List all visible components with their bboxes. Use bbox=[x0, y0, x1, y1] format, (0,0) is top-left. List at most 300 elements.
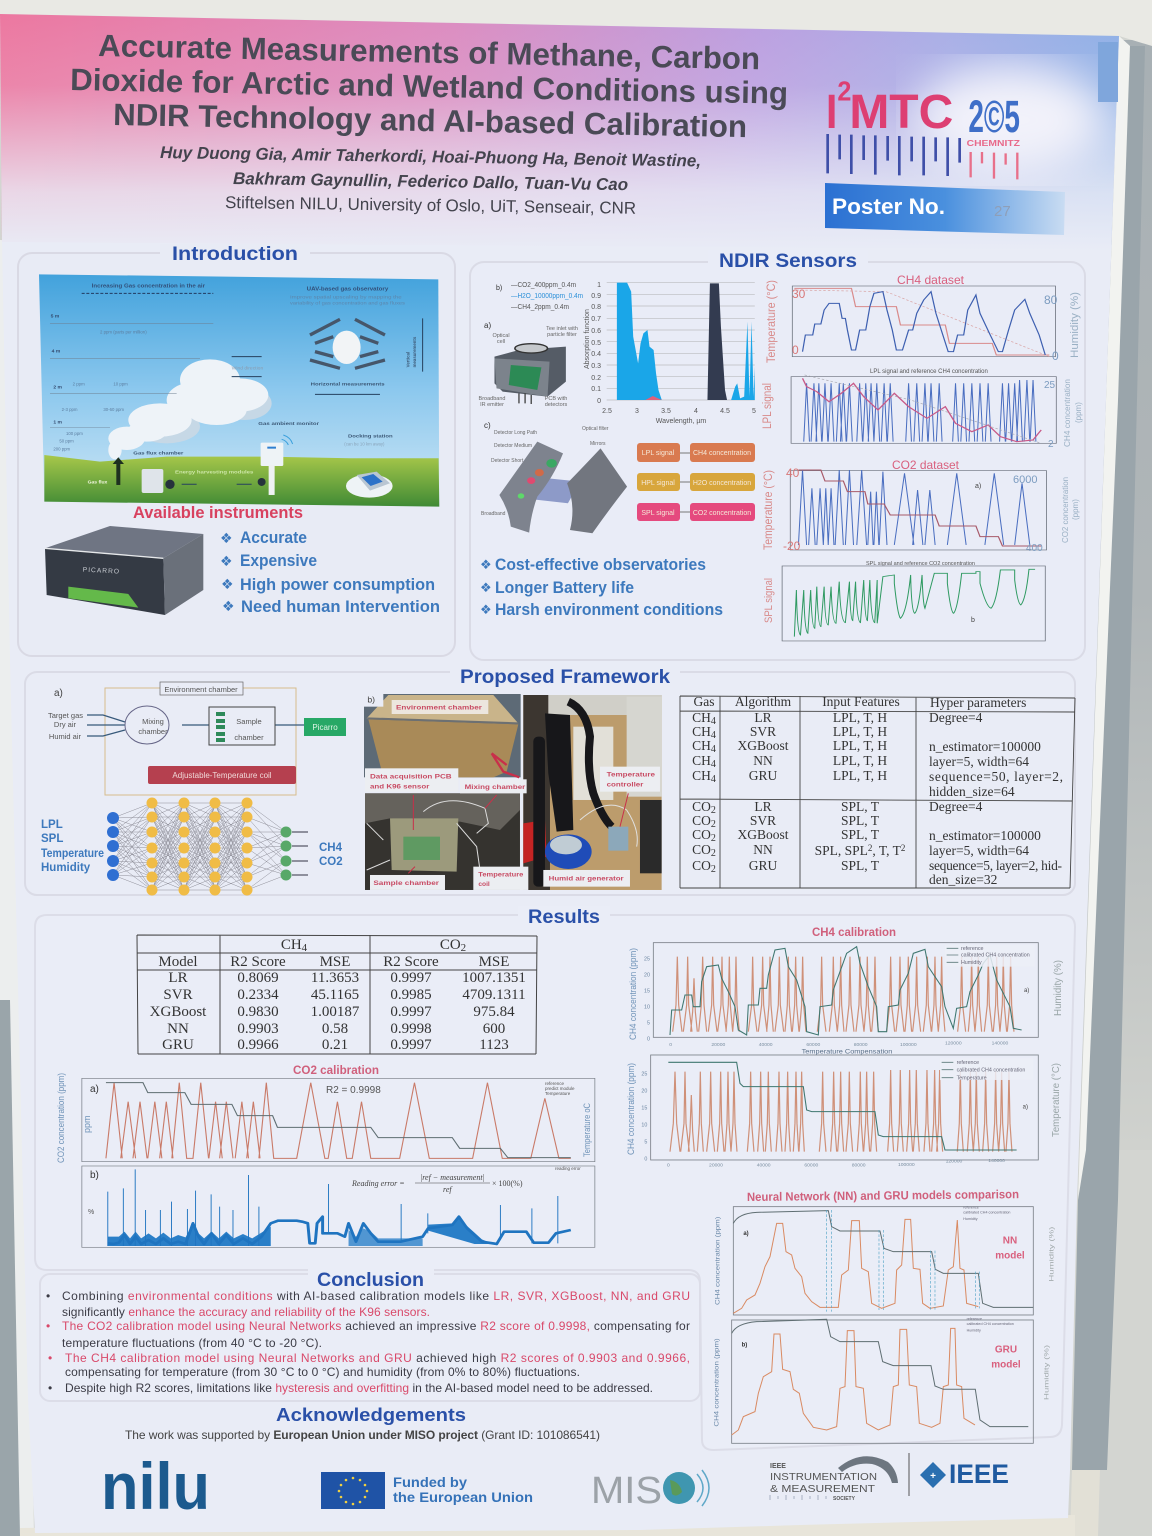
chart: LPL signal: (ppm) bbox=[1074, 402, 1083, 423]
chart: NN and GRU comparison: GRU bbox=[995, 1345, 1017, 1356]
legends: 0 bbox=[669, 1042, 672, 1048]
table: algorithms and hyper parameters: SVR bbox=[750, 724, 776, 739]
text: conclusion bullets: Combining environmental conditions with AI-based calibration models like LR, SVR, XGBoost, NN, and GRU bbox=[62, 1289, 690, 1303]
illustration: optical cavity: Detector Medium bbox=[494, 443, 532, 449]
table: model scores: 0.9830 bbox=[237, 1004, 279, 1020]
logo: IEEE Instrumentation and Measurement Society: INSTRUMENTATION bbox=[770, 1471, 877, 1483]
photo labels: Humid air generator bbox=[549, 876, 624, 883]
chart: LPL signal: 25 bbox=[1044, 380, 1056, 391]
diagram: signal to concentration: CO2 concentration bbox=[693, 510, 751, 517]
chart: NN and GRU comparison: b) bbox=[742, 1343, 747, 1349]
chart: CO2 dataset: 400 bbox=[1026, 543, 1043, 554]
list: instrument drawbacks: Accurate bbox=[240, 528, 307, 547]
table: model scores bbox=[137, 935, 537, 1054]
photo labels bbox=[364, 694, 660, 890]
illustration: K96 sensor: particle filter bbox=[547, 332, 577, 338]
legends: 25 bbox=[641, 1071, 647, 1077]
table: model scores: 0.21 bbox=[322, 1037, 348, 1053]
diagram: neural network bbox=[41, 798, 343, 896]
diagram: neural network: LPL bbox=[41, 819, 63, 831]
logo: IEEE Instrumentation and Measurement Society: & MEASUREMENT bbox=[770, 1483, 876, 1495]
table: algorithms and hyper parameters: LPL, T, H bbox=[833, 738, 887, 753]
chart: SPL signal: b bbox=[971, 617, 975, 624]
logo: IEEE Instrumentation and Measurement Society: IEEE bbox=[770, 1463, 786, 1470]
table: algorithms and hyper parameters: n_estimator=100000 bbox=[929, 739, 1041, 754]
authors bbox=[160, 143, 701, 218]
logo: IEEE Instrumentation and Measurement Society: IEEE bbox=[949, 1459, 1009, 1489]
chart: absorption spectrum: 4.5 bbox=[720, 408, 730, 415]
photo: humid air generator bbox=[523, 695, 662, 890]
chart: NN and GRU comparison: calibrated CH4 concentration bbox=[967, 1322, 1014, 1326]
chart: NN and GRU comparison: Neural Network (NN) and GRU models comparison bbox=[747, 1187, 1019, 1204]
text: acknowledgement: The work was supported by European Union under MISO project (Grant ID: 101086541) bbox=[125, 1428, 600, 1442]
legends: calibrated CH4 concentration bbox=[957, 1067, 1025, 1073]
subheading: available instruments: Available instruments bbox=[133, 503, 303, 522]
illustration: optical cavity: Optical filter bbox=[582, 426, 609, 432]
chart: SPL signal: SPL signal and reference CO2 concentration bbox=[866, 561, 975, 567]
text: conclusion bullets: • bbox=[46, 1319, 50, 1333]
table: algorithms and hyper parameters: CO bbox=[692, 799, 711, 814]
legends: 120000 bbox=[945, 1041, 962, 1047]
table: model scores: 0.9998 bbox=[390, 1021, 432, 1037]
table: model scores: 4709.1311 bbox=[462, 987, 526, 1003]
list: NDIR advantages: Cost-effective observatories bbox=[495, 555, 706, 574]
text: conclusion bullets: significantly enhance the accuracy and reliability of the K96 sensors. bbox=[62, 1305, 430, 1319]
text: conclusion bullets: • bbox=[48, 1381, 52, 1395]
table: model scores: 975.84 bbox=[473, 1004, 515, 1020]
table: model scores: 0.9997 bbox=[390, 970, 432, 986]
table: algorithms and hyper parameters: sequence=50, layer=2, bbox=[929, 769, 1063, 784]
table: model scores: R2 Score bbox=[383, 954, 439, 970]
table: model scores: 0.9997 bbox=[390, 1037, 432, 1053]
photo labels: b) bbox=[367, 695, 375, 705]
list: instrument drawbacks: ❖ bbox=[220, 554, 233, 570]
table: model scores: MSE bbox=[479, 954, 509, 970]
photo labels: Mixing chamber bbox=[465, 784, 526, 791]
illustration: K96 sensor bbox=[479, 321, 578, 408]
table: algorithms and hyper parameters: 2 bbox=[868, 843, 872, 853]
chart: CH4 dataset: 0 bbox=[792, 343, 799, 357]
table: algorithms and hyper parameters: SPL, T bbox=[841, 827, 880, 842]
diagram: environment chamber: a) bbox=[54, 688, 63, 699]
illustration: gas observatory: variability of gas concentration and gas fluxes bbox=[290, 300, 406, 305]
legends: 80000 bbox=[854, 1042, 868, 1048]
chart: CH4 dataset bbox=[764, 273, 1081, 363]
table: model scores: 0.9985 bbox=[390, 987, 432, 1003]
legends: 20 bbox=[641, 1089, 647, 1095]
legends: 5 bbox=[644, 1140, 647, 1146]
legends: 40000 bbox=[757, 1163, 771, 1169]
table: algorithms and hyper parameters: SPL, T bbox=[841, 813, 880, 828]
table: algorithms and hyper parameters: SPL, SPL bbox=[815, 843, 868, 858]
table: model scores: 11.3653 bbox=[311, 970, 359, 986]
panel: introduction bbox=[18, 244, 455, 656]
chart: absorption spectrum bbox=[496, 282, 756, 425]
text: conclusion bullets: The CH4 calibration model using Neural Networks and GRU achieved high R2 scores of 0.9903 and 0.9966, bbox=[65, 1351, 690, 1365]
chart: LPL signal bbox=[762, 369, 1083, 450]
table: algorithms and hyper parameters: 2 bbox=[711, 805, 716, 816]
table: model scores: 0.9997 bbox=[390, 1004, 432, 1020]
heading: acknowledgements: Acknowledgements bbox=[276, 1405, 466, 1425]
photo labels: Data acquisition PCB bbox=[370, 773, 452, 780]
table: algorithms and hyper parameters: CO bbox=[692, 842, 711, 857]
chart: LPL signal: 2 bbox=[1048, 439, 1054, 450]
photo labels: Temperature bbox=[607, 772, 655, 779]
chart: absorption spectrum: —H2O_10000ppm_0.4m bbox=[511, 293, 583, 300]
table: model scores: CH bbox=[281, 937, 302, 953]
illustration: gas observatory: 2 ppm bbox=[73, 381, 85, 386]
table: algorithms and hyper parameters: 4 bbox=[711, 716, 716, 727]
list: instrument drawbacks: ❖ bbox=[222, 599, 235, 615]
chart: CH4 calibration with humidity: Humidity (%) bbox=[1053, 960, 1064, 1016]
chart: CO2 calibration: a) bbox=[90, 1084, 99, 1095]
chart: CO2 calibration: × 100(%) bbox=[492, 1179, 523, 1188]
logo: IEEE Instrumentation and Measurement Society: SOCIETY bbox=[833, 1496, 856, 1502]
chart: CO2 dataset: (ppm) bbox=[1071, 499, 1080, 520]
authors: Huy Duong Gia, Amir Taherkordi, Hoai-Phuong Ha, Benoit Wastine, bbox=[160, 143, 701, 170]
logo: I2MTC 2025 Chemnitz: 2 bbox=[837, 76, 851, 107]
illustration: optical cavity: Mirrors bbox=[590, 441, 606, 447]
illustration: gas observatory: Wind direction bbox=[232, 366, 263, 372]
table: algorithms and hyper parameters: 2 bbox=[711, 864, 716, 875]
poster number bar bbox=[825, 183, 1065, 235]
photo labels: Environment chamber bbox=[396, 704, 482, 711]
authors: Stiftelsen NILU, University of Oslo, UiT, Senseair, CNR bbox=[225, 193, 636, 218]
illustration: K96 sensor: Tee inlet with bbox=[546, 326, 578, 332]
chart: CH4 dataset: CH4 dataset bbox=[897, 273, 965, 287]
chart: LPL signal: CH4 concentration bbox=[1063, 379, 1072, 447]
table: algorithms and hyper parameters: XGBoost bbox=[737, 827, 789, 842]
diagram: neural network: Temperature bbox=[41, 848, 104, 860]
chart: CO2 calibration: reading error bbox=[555, 1166, 581, 1171]
table: algorithms and hyper parameters: layer=5, width=64 bbox=[929, 754, 1029, 769]
diagram: environment chamber: chamber bbox=[138, 727, 168, 736]
table: algorithms and hyper parameters: LPL, T, H bbox=[833, 710, 887, 725]
chart: CO2 calibration: Temperature bbox=[545, 1091, 571, 1096]
illustration: gas observatory: 2 m bbox=[53, 384, 62, 390]
legends: reference bbox=[961, 946, 984, 952]
diagram: signal to concentration: SPL signal bbox=[641, 510, 675, 517]
text: conclusion bullets: The CO2 calibration model using Neural Networks achieved an impressive R2 score of 0.9998, compensating for bbox=[62, 1319, 690, 1333]
table: model scores: 45.1165 bbox=[311, 987, 359, 1003]
chart: NN and GRU comparison: a) bbox=[743, 1231, 749, 1237]
table: algorithms and hyper parameters: LR bbox=[754, 710, 772, 725]
illustration: gas observatory: 4 m bbox=[52, 349, 61, 355]
heading: introduction: Introduction bbox=[172, 244, 298, 265]
text: conclusion bullets: Despite high R2 scores, limitations like hysteresis and overfitting in the AI-based model need to be addressed. bbox=[65, 1381, 653, 1395]
logo: I2MTC 2025 Chemnitz: CHEMNITZ bbox=[967, 138, 1020, 148]
legends: 10 bbox=[644, 1005, 650, 1011]
chart: CO2 dataset: CO2 concentration bbox=[1061, 477, 1070, 543]
logo: I2MTC 2025 Chemnitz: MTC bbox=[849, 85, 953, 139]
legends: 60000 bbox=[806, 1042, 820, 1048]
chart: absorption spectrum: 0.4 bbox=[591, 351, 601, 358]
legends: 120000 bbox=[946, 1159, 963, 1165]
illustration: gas observatory: Vertical bbox=[405, 352, 410, 367]
illustration: optical cavity: Detector Long Path bbox=[494, 430, 537, 436]
legends: 140000 bbox=[988, 1158, 1005, 1164]
title bbox=[70, 28, 788, 144]
chart: NN and GRU comparison: Humidity (%) bbox=[1048, 1227, 1055, 1282]
table: model scores: 0.9903 bbox=[237, 1021, 279, 1037]
illustration: gas observatory: Improve spatial upscaling by mapping the bbox=[290, 294, 402, 299]
table: algorithms and hyper parameters: CO bbox=[692, 813, 711, 828]
table: algorithms and hyper parameters: 4 bbox=[711, 759, 716, 770]
heading: results: Results bbox=[528, 907, 600, 928]
legends: 80000 bbox=[852, 1163, 866, 1169]
panel: results bbox=[35, 906, 1075, 1450]
illustration: K96 sensor: detectors bbox=[545, 402, 568, 408]
chart: NN and GRU comparison: CH4 concentration (ppm) bbox=[715, 1217, 721, 1305]
chart: CO2 dataset: a) bbox=[975, 483, 981, 490]
chart: absorption spectrum: 3.5 bbox=[661, 408, 671, 415]
legends: 0 bbox=[644, 1157, 647, 1163]
chart: absorption spectrum: —CO2_400ppm_0.4m bbox=[511, 282, 576, 289]
table: algorithms and hyper parameters: 4 bbox=[711, 744, 716, 755]
illustration: gas observatory: UAV-based gas observatory bbox=[307, 286, 389, 292]
illustration: K96 sensor: cell bbox=[497, 339, 505, 345]
panel: NDIR sensors bbox=[470, 250, 1085, 660]
table: model scores: 0.2334 bbox=[237, 987, 279, 1003]
diagram: signal to concentration: CH4 concentration bbox=[693, 450, 751, 457]
illustration: gas observatory: 100 ppm bbox=[66, 431, 83, 436]
table: model scores: 2 bbox=[461, 942, 466, 954]
table: algorithms and hyper parameters: layer=5, width=64 bbox=[929, 843, 1029, 858]
chart: NN and GRU comparison bbox=[714, 1187, 1055, 1443]
legends: a) bbox=[1024, 988, 1029, 994]
table: model scores: CO bbox=[440, 937, 461, 953]
list: NDIR advantages: ❖ bbox=[480, 581, 492, 596]
list: instrument drawbacks: Expensive bbox=[240, 551, 317, 570]
table: model scores: 1.00187 bbox=[311, 1004, 360, 1020]
photo labels: controller bbox=[607, 782, 644, 789]
illustration: optical cavity: c) bbox=[484, 421, 491, 430]
table: model scores: 0.9966 bbox=[237, 1037, 279, 1053]
photo labels: and K96 sensor bbox=[370, 783, 430, 790]
diagram: environment chamber: Humid air bbox=[49, 732, 81, 741]
illustration: K96 sensor: a) bbox=[484, 321, 491, 330]
chart: CH4 calibration with humidity bbox=[626, 925, 1064, 1169]
logo: I2MTC 2025 Chemnitz bbox=[826, 76, 1020, 179]
legends: 60000 bbox=[804, 1163, 818, 1169]
legends: 15 bbox=[644, 989, 650, 995]
photo: environment chamber bbox=[364, 694, 521, 777]
text: conclusion bullets bbox=[46, 1289, 690, 1395]
table: algorithms and hyper parameters: Algorithm bbox=[735, 694, 792, 709]
chart: absorption spectrum: 1 bbox=[597, 282, 601, 289]
table: algorithms and hyper parameters: SPL, T bbox=[841, 799, 880, 814]
illustration: K96 sensor: IR emitter bbox=[480, 402, 504, 408]
diagram: neural network: CO2 bbox=[319, 856, 343, 868]
logo: I2MTC 2025 Chemnitz: I bbox=[826, 85, 837, 139]
poster number bar: Poster No. bbox=[832, 194, 945, 219]
table: algorithms and hyper parameters: hidden_size=64 bbox=[929, 784, 1015, 799]
legends: 5 bbox=[647, 1021, 650, 1027]
list: instrument drawbacks: ❖ bbox=[220, 531, 233, 547]
illustration: gas observatory: (can be 10 km away) bbox=[344, 441, 385, 446]
chart: CO2 dataset: -20 bbox=[783, 539, 801, 553]
chart: CO2 dataset: 40 bbox=[786, 466, 800, 480]
table: algorithms and hyper parameters: SVR bbox=[750, 813, 776, 828]
diagram: environment chamber: Dry air bbox=[54, 720, 76, 729]
diagram: environment chamber bbox=[48, 682, 346, 795]
table: algorithms and hyper parameters: 4 bbox=[711, 774, 716, 785]
chart: CH4 calibration with humidity: CH4 concentration (ppm) bbox=[628, 948, 638, 1040]
text: conclusion bullets: compensating for temperature (from 30 °C to 0 °C) and humidity (from 0% to 80%) fluctuations. bbox=[65, 1365, 580, 1379]
table: model scores: GRU bbox=[162, 1037, 194, 1053]
chart: NN and GRU comparison: NN bbox=[1003, 1235, 1017, 1246]
legends: Temperature Compensation bbox=[802, 1048, 893, 1055]
diagram: neural network: SPL bbox=[41, 833, 63, 845]
chart: absorption spectrum: 0.7 bbox=[591, 316, 601, 323]
legends: 100000 bbox=[898, 1162, 915, 1168]
chart: absorption spectrum: 0.1 bbox=[591, 386, 601, 393]
table: algorithms and hyper parameters: , T, T bbox=[872, 843, 902, 858]
photo labels: coil bbox=[478, 881, 490, 888]
illustration: gas observatory: Gas flux bbox=[88, 480, 108, 486]
legends: 25 bbox=[644, 957, 650, 963]
diagram: environment chamber: Sample bbox=[236, 717, 262, 726]
photo: picarro instrument: PICARRO bbox=[83, 567, 120, 576]
chart: NN and GRU comparison: Humidity (%) bbox=[1043, 1345, 1050, 1400]
logo: I2MTC 2025 Chemnitz: 2©5 bbox=[968, 91, 1020, 142]
chart: CO2 calibration: CO2 concentration (ppm) bbox=[56, 1073, 66, 1163]
list: instrument drawbacks: High power consumption bbox=[240, 575, 435, 594]
cloud plume bbox=[108, 359, 272, 459]
illustration: gas observatory: Gas ambient monitor bbox=[258, 421, 319, 427]
illustration: gas observatory: 10 ppm bbox=[113, 381, 128, 386]
table: algorithms and hyper parameters: CH bbox=[692, 710, 711, 725]
diagram: neural network: Humidity bbox=[41, 862, 91, 874]
illustration: gas observatory: Energy harvesting modules bbox=[175, 469, 254, 475]
table: algorithms and hyper parameters: NN bbox=[753, 753, 773, 768]
table: algorithms and hyper parameters: den_size=32 bbox=[929, 872, 997, 887]
legends: reference bbox=[957, 1060, 979, 1066]
chart: CH4 calibration with humidity: CH4 concentration (ppm) bbox=[626, 1063, 636, 1155]
legends: 40000 bbox=[759, 1042, 773, 1048]
table: algorithms and hyper parameters: 2 bbox=[901, 843, 905, 853]
chart: LPL signal: LPL signal and reference CH4 concentration bbox=[870, 369, 988, 375]
list: NDIR advantages: Longer Battery life bbox=[495, 578, 634, 597]
illustration: gas observatory: Gas flux chamber bbox=[133, 450, 183, 456]
legends: 15 bbox=[641, 1106, 647, 1112]
illustration: gas observatory: 5 m bbox=[51, 314, 60, 320]
legends bbox=[641, 945, 1035, 1169]
illustration: gas observatory: 2-3 ppm bbox=[62, 407, 78, 412]
table: model scores: 0.58 bbox=[322, 1021, 348, 1037]
chart: absorption spectrum: 0.5 bbox=[591, 340, 601, 347]
chart: NN and GRU comparison: Humidity bbox=[967, 1329, 981, 1333]
table: algorithms and hyper parameters: CO bbox=[692, 827, 711, 842]
text: conclusion bullets: temperature fluctuations (from 40 °C to -20 °C). bbox=[62, 1336, 322, 1350]
panel: proposed framework bbox=[25, 664, 1075, 895]
chart: CO2 calibration: ref bbox=[443, 1185, 453, 1194]
illustration: gas observatory: measurements bbox=[412, 336, 417, 367]
legends: 100000 bbox=[900, 1042, 917, 1048]
illustration: optical cavity: Detector Short bbox=[491, 458, 524, 464]
diagram: environment chamber: chamber bbox=[234, 733, 264, 742]
logo: funded by the European Union: Funded by bbox=[393, 1474, 467, 1490]
chart: LPL signal: LPL signal bbox=[762, 383, 774, 429]
diagram: neural network: CH4 bbox=[319, 842, 343, 854]
table: algorithms and hyper parameters: 2 bbox=[711, 833, 716, 844]
illustration: K96 sensor: Broadband bbox=[479, 396, 505, 402]
chart: absorption spectrum: —CH4_2ppm_0.4m bbox=[511, 304, 569, 311]
table: algorithms and hyper parameters: CO bbox=[692, 858, 711, 873]
authors: Bakhram Gaynullin, Federico Dallo, Tuan-Vu Cao bbox=[233, 169, 628, 194]
diagram: environment chamber: Adjustable-Temperature coil bbox=[172, 771, 272, 780]
panel: conclusion bbox=[40, 1268, 700, 1401]
photo labels: Sample chamber bbox=[373, 880, 439, 887]
table: algorithms and hyper parameters: sequence=5, layer=2, hid- bbox=[929, 858, 1062, 873]
table: algorithms and hyper parameters: LPL, T, H bbox=[833, 724, 887, 739]
legends: 10 bbox=[641, 1123, 647, 1129]
chart: CH4 dataset: 80 bbox=[1044, 293, 1058, 307]
title: Accurate Measurements of Methane, Carbon bbox=[98, 28, 760, 76]
heading: proposed framework: Proposed Framework bbox=[460, 667, 670, 688]
chart: CH4 dataset: 0 bbox=[1052, 349, 1059, 363]
chart: absorption spectrum: 3 bbox=[635, 408, 639, 415]
illustration: gas observatory: 50 ppm bbox=[59, 439, 74, 444]
diagram: signal to concentration: H2O concentration bbox=[693, 480, 751, 487]
legends: 20000 bbox=[711, 1042, 725, 1048]
table: model scores: 4 bbox=[302, 942, 308, 954]
legends: 0 bbox=[647, 1037, 650, 1043]
chart: absorption spectrum: 0.3 bbox=[591, 363, 601, 370]
table: algorithms and hyper parameters bbox=[680, 694, 1075, 888]
photo labels: Temperature bbox=[478, 872, 524, 879]
table: model scores: LR bbox=[168, 970, 188, 986]
chart: CO2 calibration bbox=[56, 1063, 595, 1247]
chart: absorption spectrum: 0 bbox=[597, 398, 601, 405]
table: algorithms and hyper parameters: Input Features bbox=[822, 694, 900, 709]
chart: CO2 calibration: R2 = 0.9998 bbox=[326, 1085, 381, 1096]
chart: CH4 calibration with humidity: CH4 calibration bbox=[812, 925, 896, 939]
chart: CO2 dataset: Temperature (°C) bbox=[761, 470, 775, 550]
legends: Humidity bbox=[961, 960, 982, 966]
chart: absorption spectrum: 5 bbox=[752, 408, 756, 415]
table: model scores: Model bbox=[158, 954, 198, 970]
chart: NN and GRU comparison: calibrated CH4 concentration bbox=[963, 1210, 1010, 1214]
legends: a) bbox=[1023, 1104, 1028, 1110]
illustration: gas observatory: 30-60 ppm bbox=[103, 407, 124, 412]
title: NDIR Technology and AI-based Calibration bbox=[113, 97, 747, 144]
illustration: gas observatory: 200 ppm bbox=[53, 447, 71, 452]
diagram: signal to concentration: LPL signal bbox=[642, 450, 675, 457]
photo: picarro instrument bbox=[45, 526, 203, 615]
chart: absorption spectrum: Wavelength, µm bbox=[656, 418, 706, 425]
photo: sample chamber bbox=[365, 793, 520, 890]
title: Dioxide for Arctic and Wetland Conditions using bbox=[70, 62, 788, 111]
table: model scores: 0.8069 bbox=[237, 970, 279, 986]
chart: NN and GRU comparison: model bbox=[991, 1359, 1021, 1370]
table: algorithms and hyper parameters: CH bbox=[692, 768, 711, 783]
logo: nilu: nilu bbox=[101, 1449, 210, 1523]
table: algorithms and hyper parameters: 2 bbox=[711, 819, 716, 830]
diagram: signal to concentration bbox=[637, 443, 755, 521]
chart: absorption spectrum: 0.9 bbox=[591, 293, 601, 300]
chart: CH4 calibration with humidity: Temperature (°C) bbox=[1051, 1063, 1062, 1137]
chart: absorption spectrum: 4 bbox=[694, 408, 698, 415]
table: algorithms and hyper parameters: Degree=4 bbox=[929, 799, 983, 814]
chart: CO2 calibration: |ref − measurement| bbox=[420, 1173, 485, 1182]
diagram: environment chamber: Picarro bbox=[312, 723, 338, 732]
chart: CO2 calibration: ppm bbox=[82, 1115, 92, 1133]
table: algorithms and hyper parameters: SPL, T bbox=[841, 858, 880, 873]
legends: calibrated CH4 concentration bbox=[961, 953, 1030, 959]
chart: SPL signal bbox=[763, 561, 1045, 641]
table: algorithms and hyper parameters: NN bbox=[753, 842, 773, 857]
